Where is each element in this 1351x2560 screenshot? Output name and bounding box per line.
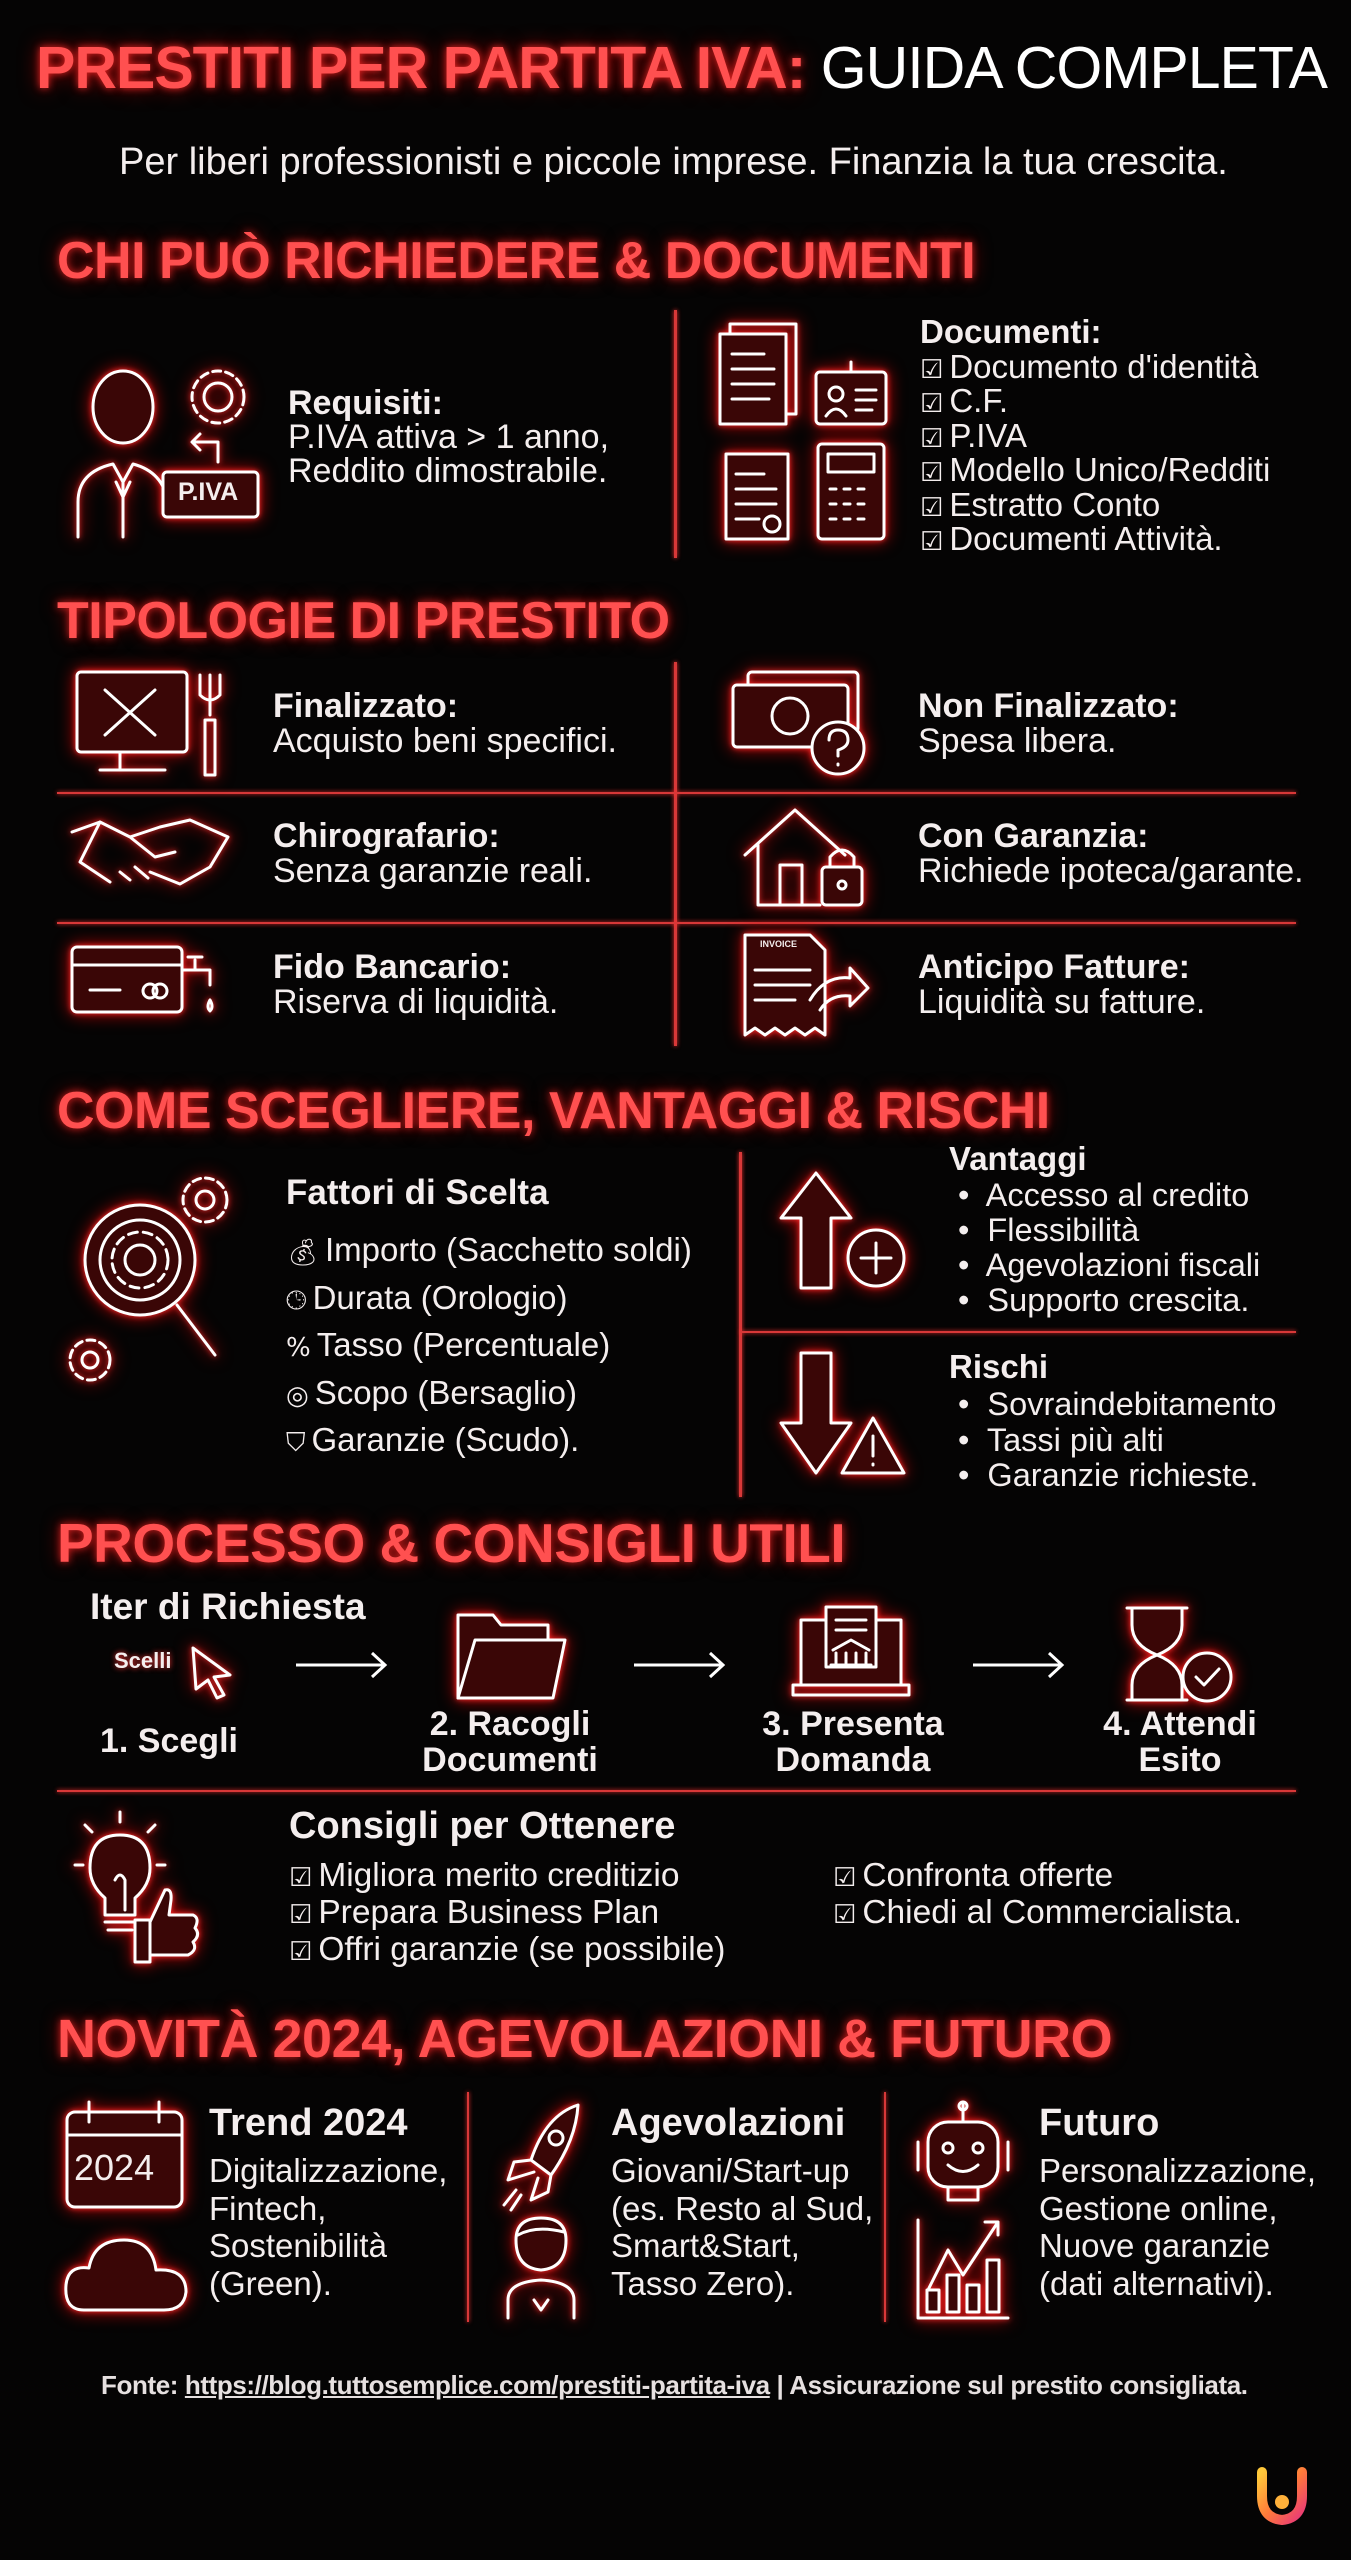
panel: chirografario: Chirografario: xyxy=(273,817,500,855)
icon: card faucet xyxy=(56,932,224,1028)
arrow xyxy=(634,1652,726,1678)
text: consigli list: ☑ xyxy=(289,1900,312,1930)
panel: trend 2024: Digitalizzazione, xyxy=(209,2152,447,2189)
heading: tipologie: TIPOLOGIE DI PRESTITO xyxy=(57,592,670,650)
logo xyxy=(1254,2466,1310,2526)
panel: futuro: Personalizzazione, xyxy=(1039,2152,1316,2189)
panel: agevolazioni: (es. Resto al Sud, xyxy=(611,2190,873,2227)
panel: non finalizzato xyxy=(718,658,1179,788)
text: documenti list: ☑ xyxy=(920,458,943,488)
text: documenti list: ☑ xyxy=(920,354,943,384)
text: requisiti: P.IVA attiva > 1 anno, xyxy=(288,418,609,456)
panel: vantaggi: • Accesso al credito xyxy=(958,1177,1249,1213)
panel: futuro: (dati alternativi). xyxy=(1039,2265,1274,2302)
icon: rocket person xyxy=(496,2100,586,2320)
panel: anticipo fatture xyxy=(730,924,1205,1048)
panel: rischi: Rischi xyxy=(949,1348,1048,1385)
text: documenti list: P.IVA xyxy=(949,416,1027,454)
panel: futuro: Gestione online, xyxy=(1039,2190,1278,2227)
panel: trend 2024: 2024 xyxy=(74,2147,154,2188)
panel: trend 2024: Fintech, xyxy=(209,2190,326,2227)
panel: anticipo fatture: Liquidità su fatture. xyxy=(918,983,1205,1021)
text: documenti list: Documenti: xyxy=(920,313,1102,350)
text: documenti list xyxy=(920,313,1270,557)
text: requisiti xyxy=(288,384,609,490)
panel: con garanzia: Richiede ipoteca/garante. xyxy=(918,852,1304,890)
panel: consigli: Consigli per Ottenere xyxy=(289,1805,675,1847)
text: consigli list: Migliora merito creditizio xyxy=(318,1857,679,1894)
panel: requisiti xyxy=(64,356,609,544)
heading: processo: PROCESSO & CONSIGLI UTILI xyxy=(57,1512,845,1574)
panel: futuro xyxy=(905,2100,1351,2320)
text: consigli list: ☑ xyxy=(289,1937,312,1967)
icon: house lock xyxy=(736,799,878,920)
panel: trend 2024: (Green). xyxy=(209,2265,332,2302)
text: fattori list: 💰︎ xyxy=(286,1238,319,1268)
icon: lightbulb thumbs up xyxy=(68,1804,212,1976)
text: iter di richiesta: Iter di Richiesta xyxy=(90,1586,366,1627)
panel: chirografario: Senza garanzie reali. xyxy=(273,852,592,890)
icon: documents xyxy=(704,310,902,554)
icon: robot chart xyxy=(913,2100,1013,2320)
panel: anticipo fatture: INVOICE xyxy=(760,939,797,949)
panel: agevolazioni: Giovani/Start-up xyxy=(611,2152,849,2189)
text: documenti list: Documenti Attività. xyxy=(949,520,1223,557)
text: fattori list xyxy=(286,1231,692,1458)
text: documenti list: ☑ xyxy=(920,424,943,454)
panel: agevolazioni xyxy=(494,2093,873,2326)
panel: rischi xyxy=(770,1338,1277,1493)
panel: requisiti: P.IVA xyxy=(178,478,238,506)
panel: fido bancario xyxy=(56,932,558,1028)
heading: come scegliere: COME SCEGLIERE, VANTAGGI & RISCHI xyxy=(57,1082,1050,1140)
step 3: Domanda xyxy=(776,1741,930,1779)
panel: documenti xyxy=(704,310,1270,557)
text: fattori list: Importo (Sacchetto soldi) xyxy=(325,1231,692,1268)
panel: fattori di scelta xyxy=(58,1166,692,1458)
icon: calendar cloud xyxy=(52,2093,200,2326)
step 1: 1. Scegli xyxy=(100,1722,238,1760)
panel: rischi: • Tassi più alti xyxy=(958,1422,1164,1458)
arrow xyxy=(973,1652,1064,1678)
panel: consigli: Chiedi al Commercialista. xyxy=(862,1894,1242,1931)
panel: finalizzato xyxy=(62,656,617,788)
text: documenti list: Modello Unico/Redditi xyxy=(949,451,1270,488)
panel: non finalizzato: Non Finalizzato: xyxy=(918,687,1179,725)
step 4: 4. Attendi xyxy=(1103,1705,1257,1743)
step 3 xyxy=(762,1592,944,1779)
text: requisiti: Requisiti: xyxy=(288,384,443,422)
panel: anticipo fatture: Anticipo Fatture: xyxy=(918,948,1190,986)
panel: vantaggi: • Agevolazioni fiscali xyxy=(958,1247,1260,1283)
step 2: 2. Racogli xyxy=(430,1705,590,1743)
text: consigli list xyxy=(289,1857,725,1968)
text: documenti list: ☑ xyxy=(920,492,943,522)
text: documenti list: Documento d'identità xyxy=(949,348,1258,384)
panel: vantaggi: • Flessibilità xyxy=(958,1212,1139,1248)
panel: vantaggi: • Supporto crescita. xyxy=(958,1282,1249,1318)
panel: finalizzato: Finalizzato: xyxy=(273,687,458,725)
panel: rischi: • Sovraindebitamento xyxy=(958,1386,1277,1422)
step 1: Scelli xyxy=(114,1648,171,1673)
panel: vantaggi: Vantaggi xyxy=(949,1140,1087,1177)
icon: invoice arrow xyxy=(730,924,879,1048)
text: documenti list: Estratto Conto xyxy=(949,486,1160,522)
heading: chi può richiedere: CHI PUÒ RICHIEDERE & DOCUMENTI xyxy=(57,232,975,290)
icon: professional xyxy=(64,356,274,544)
text: fattori list: Scopo (Bersaglio) xyxy=(315,1374,577,1410)
panel: finalizzato: Acquisto beni specifici. xyxy=(273,722,617,760)
step 3: 3. Presenta xyxy=(762,1705,944,1743)
panel: trend 2024: Trend 2024 xyxy=(209,2102,408,2144)
text: documenti list: ☑ xyxy=(920,527,943,557)
panel: agevolazioni: Smart&Start, xyxy=(611,2227,800,2264)
panel: futuro: Nuove garanzie xyxy=(1039,2227,1270,2264)
icon: up arrow plus xyxy=(770,1162,918,1303)
panel: con garanzia: Con Garanzia: xyxy=(918,817,1148,855)
panel: agevolazioni: Tasso Zero). xyxy=(611,2265,794,2302)
step 1 xyxy=(100,1638,240,1760)
icon: monitor tools xyxy=(62,656,234,788)
panel: futuro: Futuro xyxy=(1039,2102,1159,2144)
panel: fido bancario: Riserva di liquidità. xyxy=(273,983,558,1021)
panel: consigli xyxy=(68,1804,1242,1976)
footer: source: Fonte: https://blog.tuttosemplice.com/prestiti-partita-iva | Assicurazione sul prestito consigliata. xyxy=(101,2370,1248,2400)
text: consigli list: Prepara Business Plan xyxy=(318,1894,659,1931)
panel: con garanzia xyxy=(736,799,1304,920)
icon: magnifier gears xyxy=(58,1166,240,1392)
text: fattori list: 🕒︎ xyxy=(286,1286,307,1316)
panel: fattori di scelta: Fattori di Scelta xyxy=(286,1173,549,1212)
text: fattori list: ⛉ xyxy=(286,1428,306,1458)
panel: rischi: • Garanzie richieste. xyxy=(958,1457,1258,1493)
text: fattori list: Tasso (Percentuale) xyxy=(317,1326,610,1363)
text: consigli list: Offri garanzie (se possibile) xyxy=(318,1931,725,1968)
icon: money question xyxy=(718,658,878,788)
step 2: Documenti xyxy=(422,1741,598,1779)
arrow xyxy=(296,1652,388,1678)
text: requisiti: Reddito dimostrabile. xyxy=(288,452,607,490)
text: documenti list: C.F. xyxy=(949,382,1008,419)
icon: down arrow warning xyxy=(770,1338,916,1488)
text: consigli list: ☑ xyxy=(289,1863,312,1893)
subtitle: Per liberi professionisti e piccole imprese. Finanzia la tua crescita. xyxy=(119,141,1228,183)
panel: trend 2024 xyxy=(52,2093,447,2326)
panel: agevolazioni: Agevolazioni xyxy=(611,2102,845,2144)
text: fattori list: % xyxy=(286,1333,311,1363)
panel: non finalizzato: Spesa libera. xyxy=(918,722,1116,760)
panel: vantaggi xyxy=(770,1140,1260,1318)
panel: consigli: ☑ xyxy=(833,1863,856,1893)
panel: consigli: Confronta offerte xyxy=(862,1857,1113,1894)
process steps xyxy=(100,1592,1257,1779)
step 4 xyxy=(1103,1592,1257,1779)
text: documenti list: ☑ xyxy=(920,389,943,419)
panel: consigli: ☑ xyxy=(833,1900,856,1930)
title: PRESTITI PER PARTITA IVA: GUIDA COMPLETA xyxy=(36,35,1327,101)
text: fattori list: ◎ xyxy=(286,1380,309,1410)
step 4: Esito xyxy=(1138,1741,1222,1779)
step 2 xyxy=(422,1600,598,1779)
panel: fido bancario: Fido Bancario: xyxy=(273,948,511,986)
panel: trend 2024: Sostenibilità xyxy=(209,2227,387,2264)
panel: chirografario xyxy=(64,807,592,896)
text: fattori list: Durata (Orologio) xyxy=(313,1278,568,1316)
text: fattori list: Garanzie (Scudo). xyxy=(312,1421,579,1458)
icon: handshake xyxy=(64,807,239,896)
heading: novità 2024: NOVITÀ 2024, AGEVOLAZIONI & FUTURO xyxy=(57,2009,1112,2069)
